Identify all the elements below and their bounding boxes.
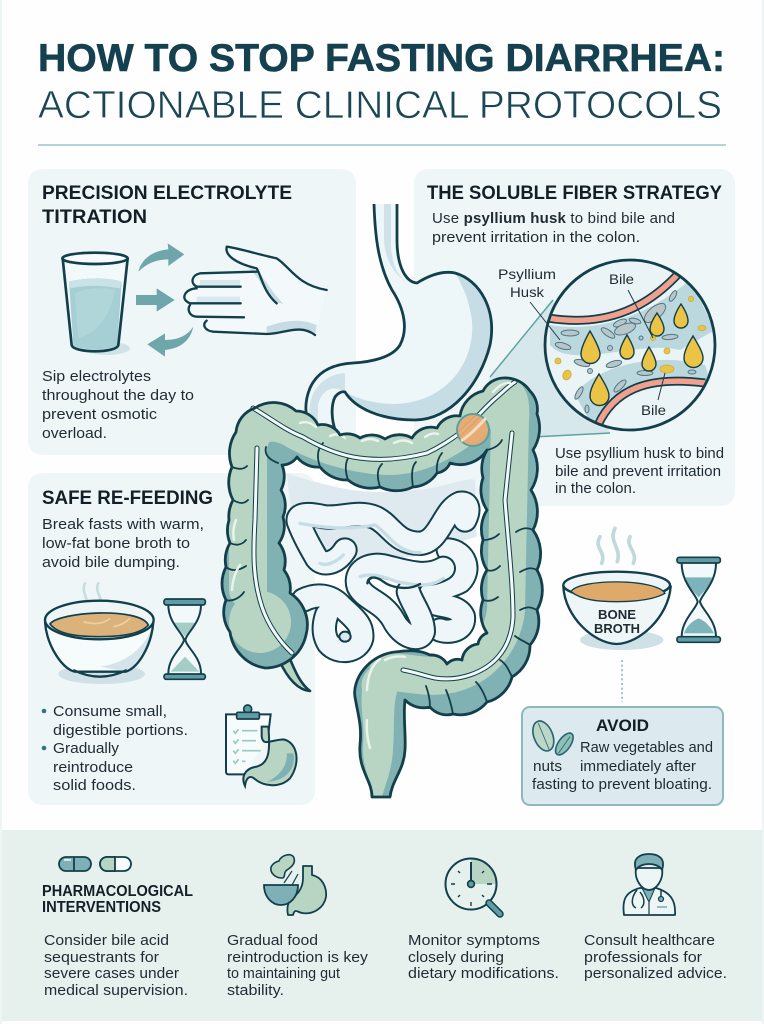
panel: bottom strip of interventions (2, 830, 762, 1021)
artery walls (548, 272, 705, 425)
column: consult professionals (584, 854, 727, 982)
text: monitor symptoms: dietary modifications. (408, 965, 559, 982)
text: psyllium caption: in the colon. (555, 480, 636, 497)
text: electrolyte advice: overload. (42, 425, 107, 442)
callout: avoid: AVOID (596, 716, 649, 735)
colon body tone (229, 395, 510, 797)
icon: leaves (529, 718, 577, 758)
tenia coli bands (253, 382, 515, 679)
heading: safe re-feeding: SAFE RE-FEEDING (42, 488, 213, 509)
text: bile acid sequestrants: medical supervision. (44, 982, 188, 999)
panel: safe re-feeding (28, 473, 315, 805)
icon: bone broth bowl (563, 528, 671, 650)
heading: pharmacological: PHARMACOLOGICAL (42, 883, 193, 900)
text: consult: Consult healthcare (584, 932, 715, 949)
bulleted list: Gradually (53, 740, 120, 757)
inflamed colon spot (457, 414, 489, 446)
text: gradual food (227, 932, 369, 999)
text: psyllium intro (432, 210, 675, 246)
label lines (530, 290, 665, 400)
icon: hourglass (677, 557, 720, 642)
icon: capsules (59, 857, 131, 871)
panel: soluble fiber strategy (414, 169, 735, 506)
panel: precision electrolyte titration (28, 169, 356, 455)
labels: psyllium husk and bile: Bile (641, 402, 666, 418)
bulleted list: digestible portions. (53, 722, 188, 739)
text: gradual food: Gradual food (227, 932, 318, 949)
icon: doctor (623, 854, 675, 915)
haustra folds (226, 440, 537, 714)
column: pharmacological interventions (42, 857, 193, 999)
text: bile acid sequestrants: severe cases under (44, 965, 179, 982)
icon: hourglass (164, 599, 205, 679)
labels: psyllium husk and bile: Bile (609, 271, 634, 287)
small icon row and callout: bone broth and avoid (522, 528, 723, 805)
text: psyllium caption: bile and prevent irritation (555, 463, 721, 480)
title: ACTIONABLE CLINICAL PROTOCOLS (38, 84, 722, 127)
text: gradual food: to maintaining gut (227, 965, 341, 982)
icon: hand (184, 247, 327, 335)
callout: avoid: nuts (533, 758, 562, 775)
icon: bowl and stomach (264, 855, 326, 915)
icon: bone broth bowl: BROTH (594, 621, 640, 636)
text: electrolyte advice: Sip electrolytes (42, 368, 151, 385)
icon: clipboard and stomach (226, 705, 297, 786)
text: monitor symptoms (408, 932, 559, 982)
text: gradual food: reintroduction is key (227, 949, 369, 966)
text: consult: personalized advice. (584, 965, 727, 982)
icon: clock magnifier (446, 858, 500, 914)
callout: avoid: immediately after (580, 758, 696, 775)
text: re-feeding advice (42, 516, 204, 571)
stomach and esophagus (306, 204, 492, 432)
central digestive system illustration (222, 204, 542, 797)
text: bile acid sequestrants: Consider bile acid (44, 932, 169, 949)
callout: avoid (522, 707, 723, 805)
text: consult: professionals for (584, 949, 702, 966)
bulleted list: reintroduce (53, 759, 133, 776)
bile droplets (581, 304, 703, 406)
heading: electrolyte: TITRATION (42, 207, 147, 228)
magnified view of colon contents (545, 260, 715, 430)
icon: dosing arrows (136, 243, 193, 357)
labels: psyllium husk and bile: Husk (510, 284, 545, 300)
small intestine (287, 473, 477, 650)
bulleted list: solid foods. (53, 777, 136, 794)
heading: pharmacological (42, 883, 193, 916)
text: electrolyte advice: throughout the day to (42, 387, 194, 404)
text: psyllium intro: prevent irritation in the colon. (432, 229, 640, 246)
heading: pharmacological: INTERVENTIONS (42, 899, 161, 916)
text: monitor symptoms: closely during (408, 949, 504, 966)
appendix (279, 650, 310, 691)
labels: psyllium husk and bile (498, 266, 666, 418)
heading: electrolyte: PRECISION ELECTROLYTE (42, 183, 292, 204)
text: re-feeding advice: Break fasts with warm, (42, 516, 204, 533)
psyllium husk particles (554, 290, 696, 413)
text: bile acid sequestrants: sequestrants for (44, 949, 159, 966)
icon: bone broth bowl: BONE (598, 607, 636, 622)
bulleted list (42, 703, 188, 794)
text: psyllium caption (555, 445, 724, 497)
text: bile acid sequestrants (44, 932, 188, 999)
large intestine (222, 378, 542, 797)
text: electrolyte advice: prevent osmotic (42, 406, 158, 423)
text: monitor symptoms: Monitor symptoms (408, 932, 540, 949)
bulleted list: Consume small, (53, 703, 167, 720)
column: monitor symptoms (408, 858, 559, 982)
title (38, 37, 725, 127)
title: HOW TO STOP FASTING DIARRHEA: (38, 37, 725, 80)
text: consult (584, 932, 727, 982)
callout: avoid: fasting to prevent bloating. (532, 776, 712, 793)
text: psyllium caption: Use psyllium husk to bind (555, 445, 724, 462)
text: re-feeding advice: avoid bile dumping. (42, 554, 180, 571)
colon outline (222, 378, 542, 797)
column: gradual food reintroduction (227, 855, 369, 999)
text: re-feeding advice: low-fat bone broth to (42, 535, 190, 552)
text: electrolyte advice (42, 368, 194, 442)
heading: soluble fiber: THE SOLUBLE FIBER STRATEGY (427, 183, 722, 204)
magnifier cone (473, 300, 610, 437)
text: psyllium intro: Use psyllium husk to bind bile and (432, 210, 675, 227)
icon: water glass (62, 253, 130, 355)
highlights (232, 383, 510, 748)
text: gradual food: stability. (227, 982, 284, 999)
callout: avoid: Raw vegetables and (580, 739, 713, 756)
icon: broth bowl (45, 583, 154, 684)
heading: electrolyte (42, 183, 292, 228)
labels: psyllium husk and bile: Psyllium (498, 266, 556, 282)
